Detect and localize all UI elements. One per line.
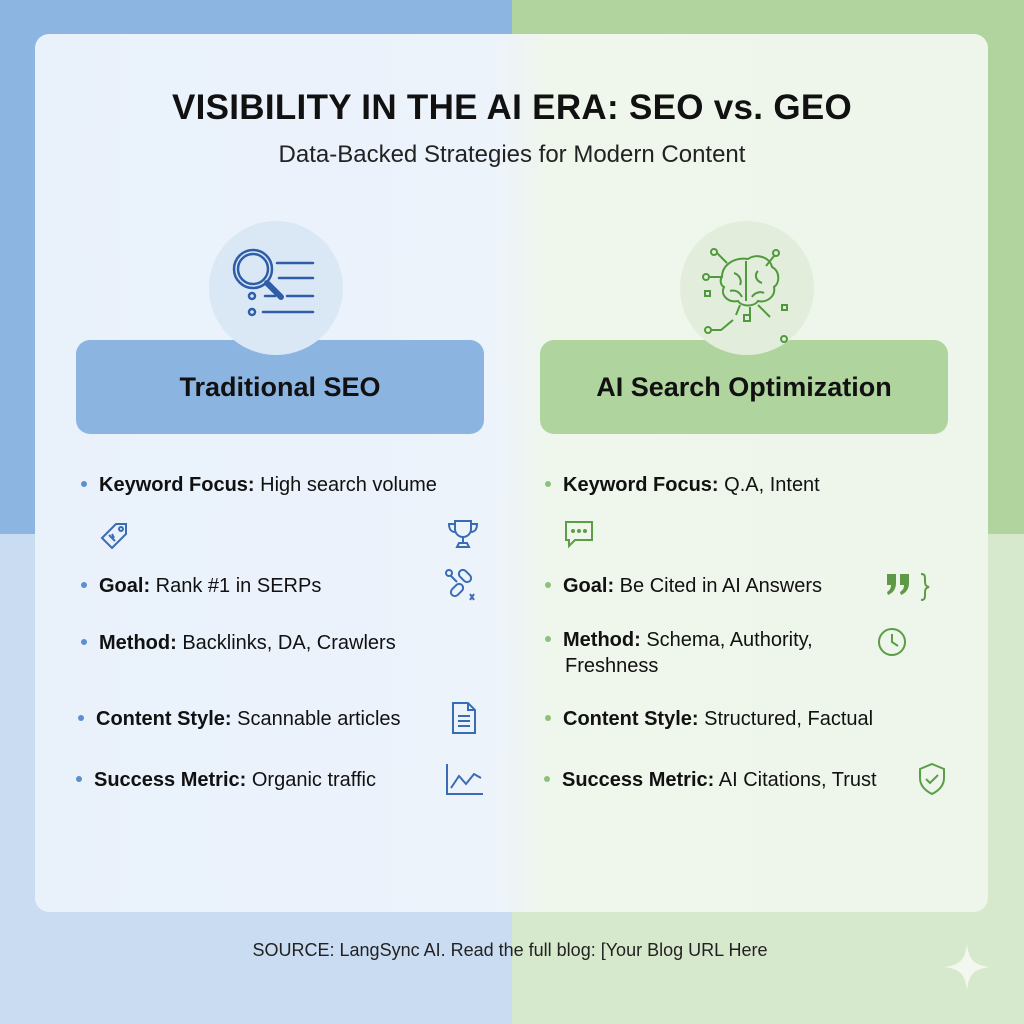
icon: sparkle — [945, 945, 989, 989]
panel: AI search header — [540, 340, 948, 434]
main card — [35, 34, 988, 912]
panel: traditional SEO header — [76, 340, 484, 434]
icon: chart — [446, 764, 483, 795]
icon: search list — [209, 221, 343, 355]
item: success metric: Success Metric: AI Citations, Trust — [562, 769, 877, 791]
item: method — [545, 629, 813, 677]
icon: clock — [878, 628, 906, 656]
item: keyword focus: Keyword Focus: Q.A, Intent — [563, 474, 820, 496]
icon: shield — [919, 762, 945, 796]
icon: document — [452, 702, 476, 734]
item: goal: Goal: Be Cited in AI Answers — [563, 575, 822, 597]
item: method: Method: Backlinks, DA, Crawlers — [99, 632, 396, 654]
item: content style: Content Style: Structured, Factual — [563, 708, 873, 730]
list: traditional SEO — [76, 474, 483, 795]
icon: chat bubble — [565, 521, 593, 548]
icon: quote — [887, 573, 930, 601]
footer source: SOURCE: LangSync AI. Read the full blog: [Your Blog URL Here — [253, 940, 767, 960]
item: content style: Content Style: Scannable articles — [96, 708, 401, 730]
icon: brain — [680, 221, 814, 355]
item: goal: Goal: Rank #1 in SERPs — [99, 575, 321, 597]
background — [0, 0, 512, 534]
item: success metric: Success Metric: Organic traffic — [94, 769, 376, 791]
item: keyword focus: Keyword Focus: High search volume — [99, 474, 437, 496]
heading: traditional SEO: Traditional SEO — [179, 372, 381, 402]
icon: trophy — [448, 520, 478, 548]
icon: tag — [100, 523, 127, 550]
subtitle: Data-Backed Strategies for Modern Content — [279, 141, 745, 168]
list: AI search — [544, 474, 945, 796]
title: VISIBILITY IN THE AI ERA: SEO vs. GEO — [172, 88, 852, 127]
item: method: Freshness — [565, 655, 658, 677]
icon: link — [445, 568, 475, 600]
heading: AI search optimization: AI Search Optimization — [596, 372, 892, 402]
item: method: Method: Schema, Authority, — [563, 629, 813, 651]
